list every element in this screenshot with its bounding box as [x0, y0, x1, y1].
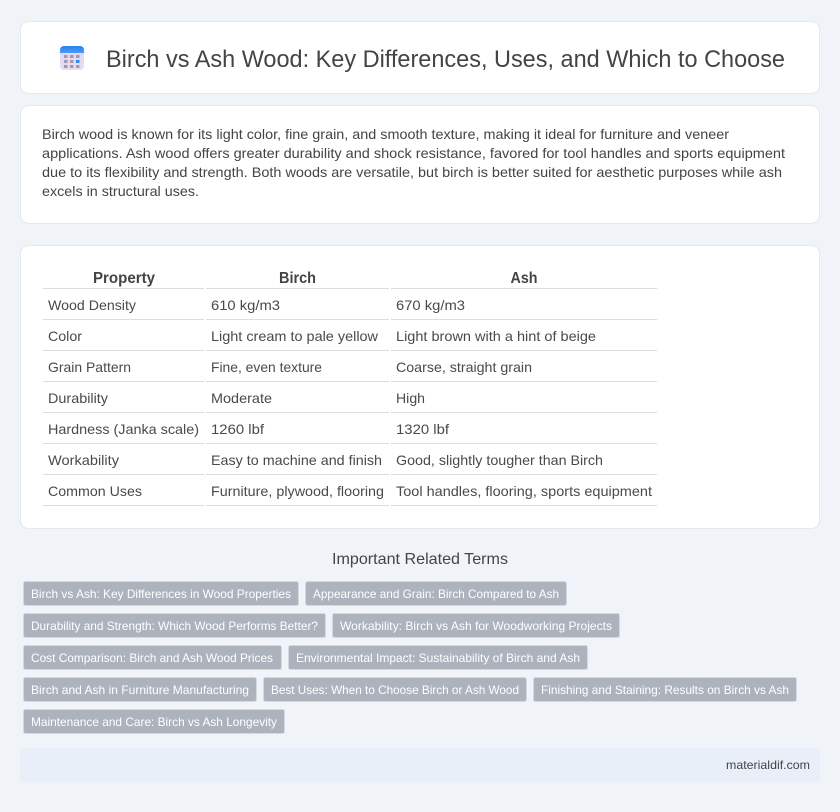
row: common uses: Furniture, plywood, flooring [211, 483, 384, 499]
row: durability: Durability [48, 390, 108, 406]
tag: Birch and Ash in Furniture Manufacturing [31, 683, 249, 697]
source credit: materialdif.com [726, 758, 810, 772]
icon: calendar [60, 46, 84, 70]
header panel [20, 22, 820, 94]
row: common uses: Common Uses [48, 483, 142, 499]
tag: Finishing and Staining: Results on Birch vs Ash [541, 683, 789, 697]
table header [93, 270, 538, 287]
tag [24, 582, 298, 606]
tag [24, 710, 284, 734]
row: durability: High [396, 390, 425, 406]
row: grain pattern [48, 359, 532, 375]
row: wood density [48, 297, 465, 313]
row: hardness: 1260 lbf [211, 421, 264, 437]
row: durability [48, 390, 425, 406]
heading: related terms: Important Related Terms [332, 551, 508, 568]
tag: Appearance and Grain: Birch Compared to Ash [313, 587, 559, 601]
row: grain pattern: Coarse, straight grain [396, 359, 532, 375]
tag: Maintenance and Care: Birch vs Ash Longevity [31, 715, 277, 729]
table header: Ash [510, 270, 538, 287]
row: color [48, 328, 596, 344]
row: hardness: 1320 lbf [396, 421, 449, 437]
row: common uses: Tool handles, flooring, sports equipment [396, 483, 652, 499]
tag: Durability and Strength: Which Wood Performs Better? [31, 619, 318, 633]
row: color: Light cream to pale yellow [211, 328, 379, 344]
table header: Birch [279, 270, 316, 287]
row: workability: Good, slightly tougher than Birch [396, 452, 603, 468]
tag [24, 614, 326, 638]
intro paragraph: applications. Ash wood offers greater durability and shock resistance, favored for tool handles and sports equipment [42, 145, 785, 161]
row: workability: Workability [48, 452, 119, 468]
tag: Birch vs Ash: Key Differences in Wood Properties [31, 587, 291, 601]
row: wood density: 670 kg/m3 [396, 297, 465, 313]
intro paragraph: due to its flexibility and strength. Both woods are versatile, but birch is better suited for aesthetic purposes while ash [42, 164, 782, 180]
panel: comparison table [20, 246, 820, 528]
row: hardness [48, 421, 449, 437]
row: grain pattern: Fine, even texture [211, 359, 322, 375]
table header: Property [93, 270, 155, 287]
row: grain pattern: Grain Pattern [48, 359, 131, 375]
row: common uses [48, 483, 652, 499]
intro paragraph: Birch wood is known for its light color, fine grain, and smooth texture, making it ideal for furniture and veneer [42, 126, 729, 142]
tag [264, 678, 526, 702]
title: Birch vs Ash Wood: Key Differences, Uses, and Which to Choose [106, 46, 785, 73]
tag: Environmental Impact: Sustainability of Birch and Ash [296, 651, 580, 665]
related term tags [24, 582, 796, 734]
row: hardness: Hardness (Janka scale) [48, 421, 199, 437]
footer [20, 748, 820, 782]
tag [288, 646, 588, 670]
tag [24, 678, 256, 702]
tag [332, 614, 620, 638]
row: workability: Easy to machine and finish [211, 452, 382, 468]
tag [534, 678, 796, 702]
row: wood density: Wood Density [48, 297, 136, 313]
tag [24, 646, 282, 670]
row: wood density: 610 kg/m3 [211, 297, 280, 313]
panel: introduction [20, 106, 820, 224]
intro paragraph: excels in structural uses. [42, 183, 199, 199]
tag [306, 582, 566, 606]
row: durability: Moderate [211, 390, 272, 406]
row: color: Light brown with a hint of beige [396, 328, 596, 344]
intro paragraph [42, 126, 785, 199]
tag: Best Uses: When to Choose Birch or Ash Wood [271, 683, 519, 697]
row: workability [48, 452, 603, 468]
tag: Workability: Birch vs Ash for Woodworking Projects [340, 619, 612, 633]
row: color: Color [48, 328, 82, 344]
tag: Cost Comparison: Birch and Ash Wood Prices [31, 651, 273, 665]
